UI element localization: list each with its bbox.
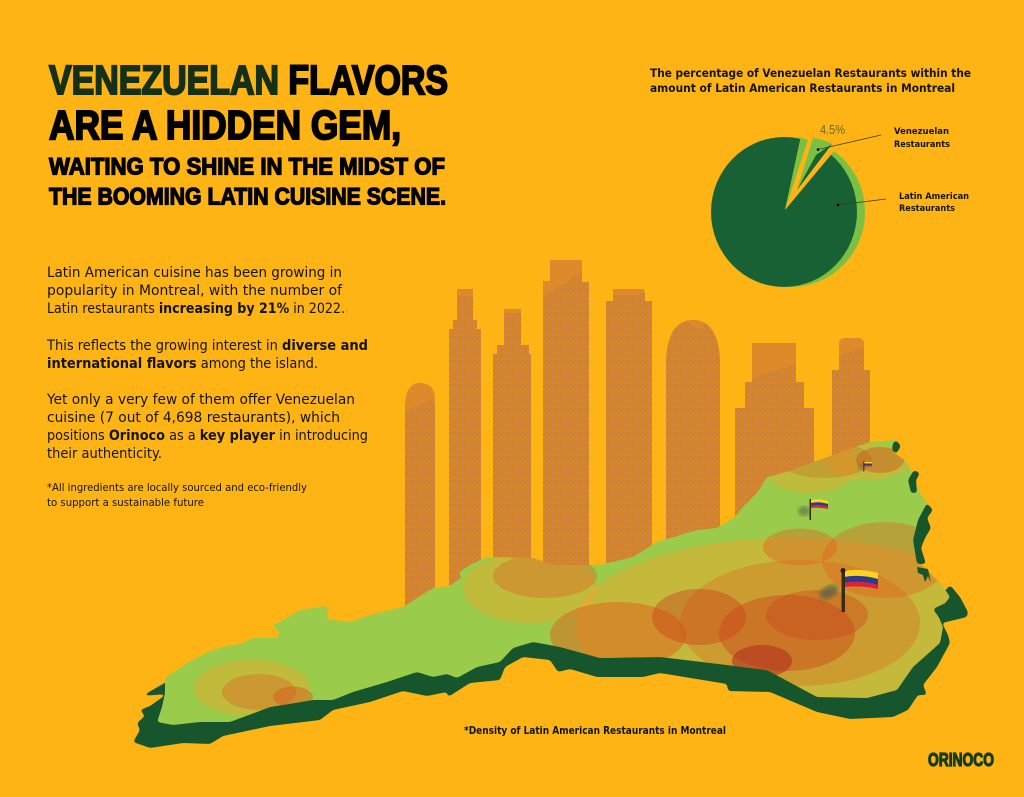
building 7 [735,343,814,520]
building 6 [666,320,720,550]
flag: small [858,462,872,472]
body text: paragraph 2: international flavors among the island. [47,356,318,372]
body text: paragraph 3: Yet only a very few of them offer Venezuelan [46,392,355,408]
subtitle line 2: THE BOOMING LATIN CUISINE SCENE. [49,184,446,210]
pie main slice [711,137,857,287]
building 1 [405,383,435,605]
density: centre olive [463,553,597,623]
footnote: *All ingredients are locally sourced and eco-friendly [47,482,307,494]
density: centre tan [493,554,597,598]
map shadow [133,585,968,748]
flag: large [817,568,878,612]
title [49,57,448,210]
body text: paragraph 1: popularity in Montreal, with the number of [47,283,343,299]
building 4 [543,260,589,570]
label Latin American [899,192,969,214]
Venezuelan slice dark part [797,144,832,190]
density: large east olive [575,538,950,698]
pie chart [711,118,969,287]
body text: paragraph 3: their authenticity. [47,446,162,462]
subtitle line 1: WAITING TO SHINE IN THE MIDST OF [49,154,445,180]
pie sliver [785,138,808,210]
pie shadow [717,137,865,287]
Orinoco logo: ORINOCO [928,750,994,770]
coast details [892,440,968,622]
leader line Venezuelan [817,135,881,151]
title line 1: VENEZUELAN FLAVORS [49,57,448,103]
density: north olive A [768,450,857,493]
body text: paragraph 3: cuisine (7 out of 4,698 restaurants), which [47,410,340,426]
building 3 [493,309,531,570]
label Venezuelan: Venezuelan [894,127,949,137]
body text: paragraph 1: Latin American cuisine has been growing in [47,265,342,281]
density: south-centre orange [550,602,686,658]
density: south-centre brown [652,589,746,645]
label Latin American: Latin American [899,192,969,202]
density: west orange [273,686,313,708]
building 8 [832,338,870,470]
body text: paragraph 1 [47,265,345,317]
pie chart title [650,66,971,95]
body text: paragraph 3 [46,392,368,462]
coast fork [917,567,931,583]
pie chart title: The percentage of Venezuelan Restaurants within the [650,66,971,80]
density: west tan [222,674,296,710]
density: north olive B [828,444,908,480]
pie chart title: amount of Latin American Restaurants in Montreal [650,81,955,95]
flag: medium [798,499,828,520]
density: red A [719,595,855,671]
density: east brown [822,522,948,598]
island [157,440,950,725]
map caption: *Density of Latin American Restaurants in Montreal [464,725,726,737]
body text: paragraph 3: positions Orinoco as a key player in introducing [47,428,368,444]
footnote: to support a sustainable future [47,497,204,509]
title line 2: ARE A HIDDEN GEM, [49,102,401,148]
density ellipses [194,437,1005,716]
density: red B [766,590,868,640]
density: west olive [194,660,310,716]
wedge gap [785,118,860,210]
body text: paragraph 2: This reflects the growing interest in diverse and [46,338,368,354]
Venezuelan slice [797,138,832,190]
density: mid tan [763,528,837,566]
percentage label: 4.5% [820,122,845,137]
skyline [405,260,870,605]
label Venezuelan: Restaurants [894,140,950,150]
label Latin American: Restaurants [899,204,955,214]
density: north brown [856,447,904,473]
density: small red [732,645,792,677]
body text: paragraph 1: Latin restaurants increasing by 21% in 2022. [47,301,345,317]
building 5 [606,289,652,570]
footnote [47,482,307,509]
map of Montreal [133,437,1005,748]
label Venezuelan [894,127,950,150]
body text: paragraph 2 [46,338,368,372]
building 2 [449,289,481,585]
density: large tan [680,560,920,686]
leader line Latin American [837,199,886,206]
density: north tan [788,446,872,478]
